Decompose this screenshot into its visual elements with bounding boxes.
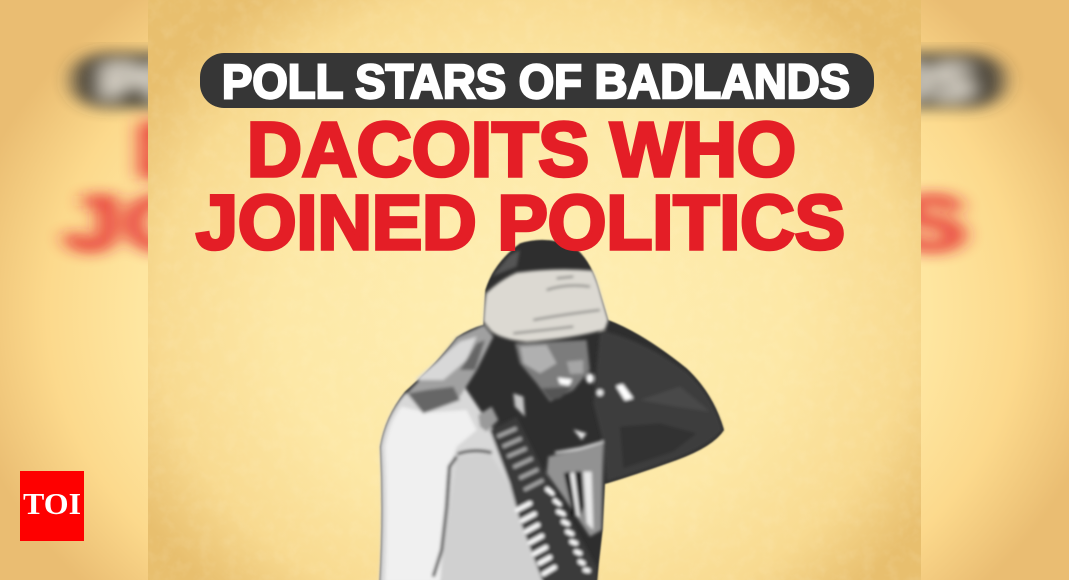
headline pill: POLL STARS OF BADLANDS [222,56,850,109]
shirt stripes [564,472,577,517]
lower belt cartridges [517,489,588,574]
logo: TOI: TOI [23,486,81,521]
bandage [483,269,608,342]
title: DACOITS WHO [247,107,796,193]
background: blurred stretched copy of the poster: JOINED POLITICS [64,180,967,267]
shoulder strap patch [478,407,498,432]
teeth and knuckles [558,378,572,386]
panel: central parchment [148,0,921,580]
scarf [407,325,493,413]
jacket seams [457,451,492,454]
hair highlight [492,250,520,277]
face [515,340,590,402]
upper belt bands [497,428,543,490]
title [196,107,845,266]
raised arm [593,330,723,482]
left sleeve highlight [385,407,477,580]
title: JOINED POLITICS [196,180,845,266]
logo: TOI [20,471,84,541]
shirt panel [547,443,603,537]
silhouette base [379,240,724,580]
jacket [378,386,514,580]
background: blurred stretched copy of the poster: POLL STARS OF BADLANDS [101,56,972,109]
photo: masked bandit with ammunition belt [379,240,724,580]
ammunition belt [490,417,597,580]
jacket front [459,460,536,572]
background: blurred stretched copy of the poster: DACOITS WHO [134,107,899,194]
